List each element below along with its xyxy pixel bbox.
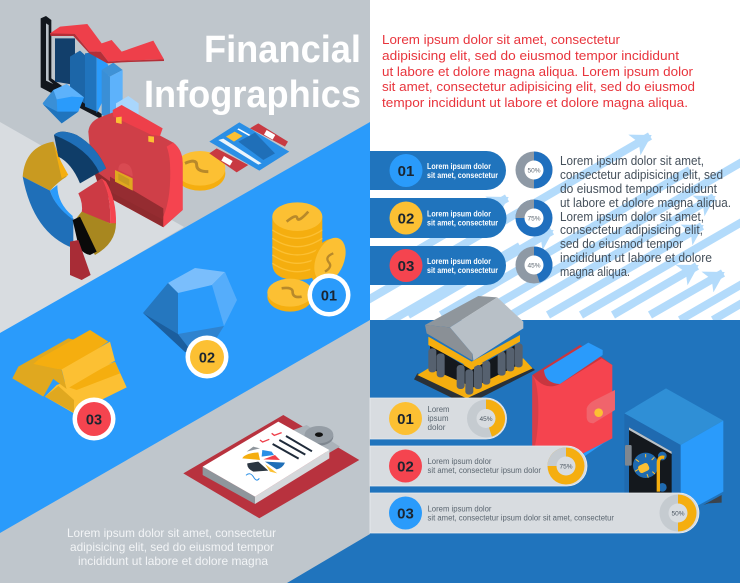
- text block: dark body copy: Lorem ipsum dolor sit amet,: [560, 210, 704, 224]
- pill 03: 03: [398, 258, 414, 275]
- icon: gold coin stack: [267, 202, 352, 312]
- panel: grey stat pills: [370, 398, 699, 533]
- icon: bar chart with red arrow: [41, 16, 164, 123]
- text block: red intro: [382, 32, 695, 110]
- donut: 45%: [516, 246, 552, 284]
- icon: clipboard report: [183, 415, 359, 518]
- text block: dark body copy: ut labore et dolore magna aliqua.: [560, 196, 731, 210]
- icon: segmented ring chart: [23, 132, 116, 280]
- text block: bottom left: adipisicing elit, sed do eiusmod tempor: [70, 540, 274, 554]
- text block: dark body copy: magna aliqua.: [560, 265, 630, 279]
- donut: 50%: [516, 152, 552, 188]
- text block: red intro: Lorem ipsum dolor sit amet, consectetur: [382, 32, 621, 47]
- stat pill 02: 02: [397, 458, 414, 476]
- panel: right background with arrows: [370, 132, 740, 583]
- text block: dark body copy: consectetur adipisicing elit,: [560, 223, 703, 237]
- stat pill 02: Lorem ipsum dolor: [428, 457, 492, 466]
- pill 02: 02: [398, 210, 414, 228]
- pill 01: [370, 151, 506, 190]
- badge 02: [186, 336, 228, 378]
- title: [144, 29, 361, 116]
- stat pill 01: dolor: [428, 423, 446, 432]
- badge 01: [308, 274, 350, 316]
- pill 03: sit amet, consectetur: [427, 265, 499, 275]
- title: Financial: [204, 29, 361, 71]
- stat pill 01: Lorem: [428, 405, 450, 414]
- stat pill 01: 45%: [479, 416, 493, 423]
- stat pill 01: [370, 398, 506, 439]
- text block: dark body copy: Lorem ipsum dolor sit amet,: [560, 154, 704, 168]
- badge 03: 03: [86, 412, 102, 428]
- icon: red wallet: [532, 343, 615, 456]
- text block: red intro: adipisicing elit, sed do eiusmod tempor incididunt: [382, 48, 679, 63]
- text block: red intro: tempor incididunt ut labore et dolore magna aliqua.: [382, 95, 688, 110]
- text block: dark body copy: sed do eiusmod tempor: [560, 237, 683, 251]
- icon: large gem: [143, 268, 237, 352]
- text block: dark body copy: do eiusmod tempor incididunt: [560, 182, 717, 196]
- icon: blue safe: [624, 388, 723, 515]
- stat pill 01: 01: [397, 411, 414, 428]
- text block: dark body copy: [560, 154, 731, 279]
- badge 03: [72, 398, 116, 440]
- stat pill 03: 50%: [671, 510, 685, 518]
- icon: bank building: [414, 296, 535, 405]
- stat pill 02: [370, 446, 587, 486]
- donut: 50%: 50%: [527, 168, 541, 174]
- donut: 75%: [516, 200, 552, 236]
- text block: bottom left: incididunt ut labore et dolore magna: [78, 554, 268, 568]
- title: Infographics: [144, 74, 361, 116]
- pill 02: [370, 198, 506, 238]
- badge 02: 02: [199, 350, 215, 366]
- stat pill 03: sit amet, consectetur ipsum dolor sit amet, consectetur: [428, 514, 614, 522]
- pill 03: [370, 246, 506, 285]
- stat pill 03: 03: [397, 506, 414, 522]
- donut: 75%: 75%: [527, 216, 541, 222]
- donut: 45%: 45%: [527, 262, 541, 270]
- pill 02: Lorem ipsum dolor: [427, 208, 492, 218]
- stat pill 03: [370, 493, 699, 533]
- pill 02: sit amet, consectetur: [427, 218, 499, 228]
- pill 01: Lorem ipsum dolor: [427, 161, 492, 171]
- icon: gold bars: [12, 330, 127, 413]
- pill 03: Lorem ipsum dolor: [427, 256, 492, 266]
- icon: gold coin behind briefcase: [175, 151, 225, 191]
- text block: red intro: ut labore et dolore magna aliqua. Lorem ipsum dolor: [382, 64, 694, 79]
- text block: bottom left: [67, 526, 276, 568]
- pill 01: 01: [398, 163, 414, 180]
- text block: bottom left: Lorem ipsum dolor sit amet, consectetur: [67, 526, 276, 540]
- text block: red intro: sit amet, consectetur adipisicing elit, sed do eiusmod: [382, 79, 695, 94]
- stat pill 01: ipsum: [428, 414, 449, 423]
- panel: left background: [0, 0, 370, 583]
- icon: red briefcase: [88, 105, 183, 227]
- stat pill 02: sit amet, consectetur ipsum dolor: [428, 466, 541, 475]
- text block: dark body copy: consectetur adipisicing elit, sed: [560, 168, 723, 182]
- icon: credit cards: [209, 122, 289, 172]
- panel: blue label pills: [370, 151, 506, 285]
- text block: dark body copy: incididunt ut labore et dolore: [560, 251, 712, 265]
- stat pill 03: Lorem ipsum dolor: [428, 504, 492, 514]
- badge 01: 01: [321, 288, 337, 304]
- pill 01: sit amet, consectetur: [427, 170, 499, 180]
- stat pill 02: 75%: [559, 464, 573, 470]
